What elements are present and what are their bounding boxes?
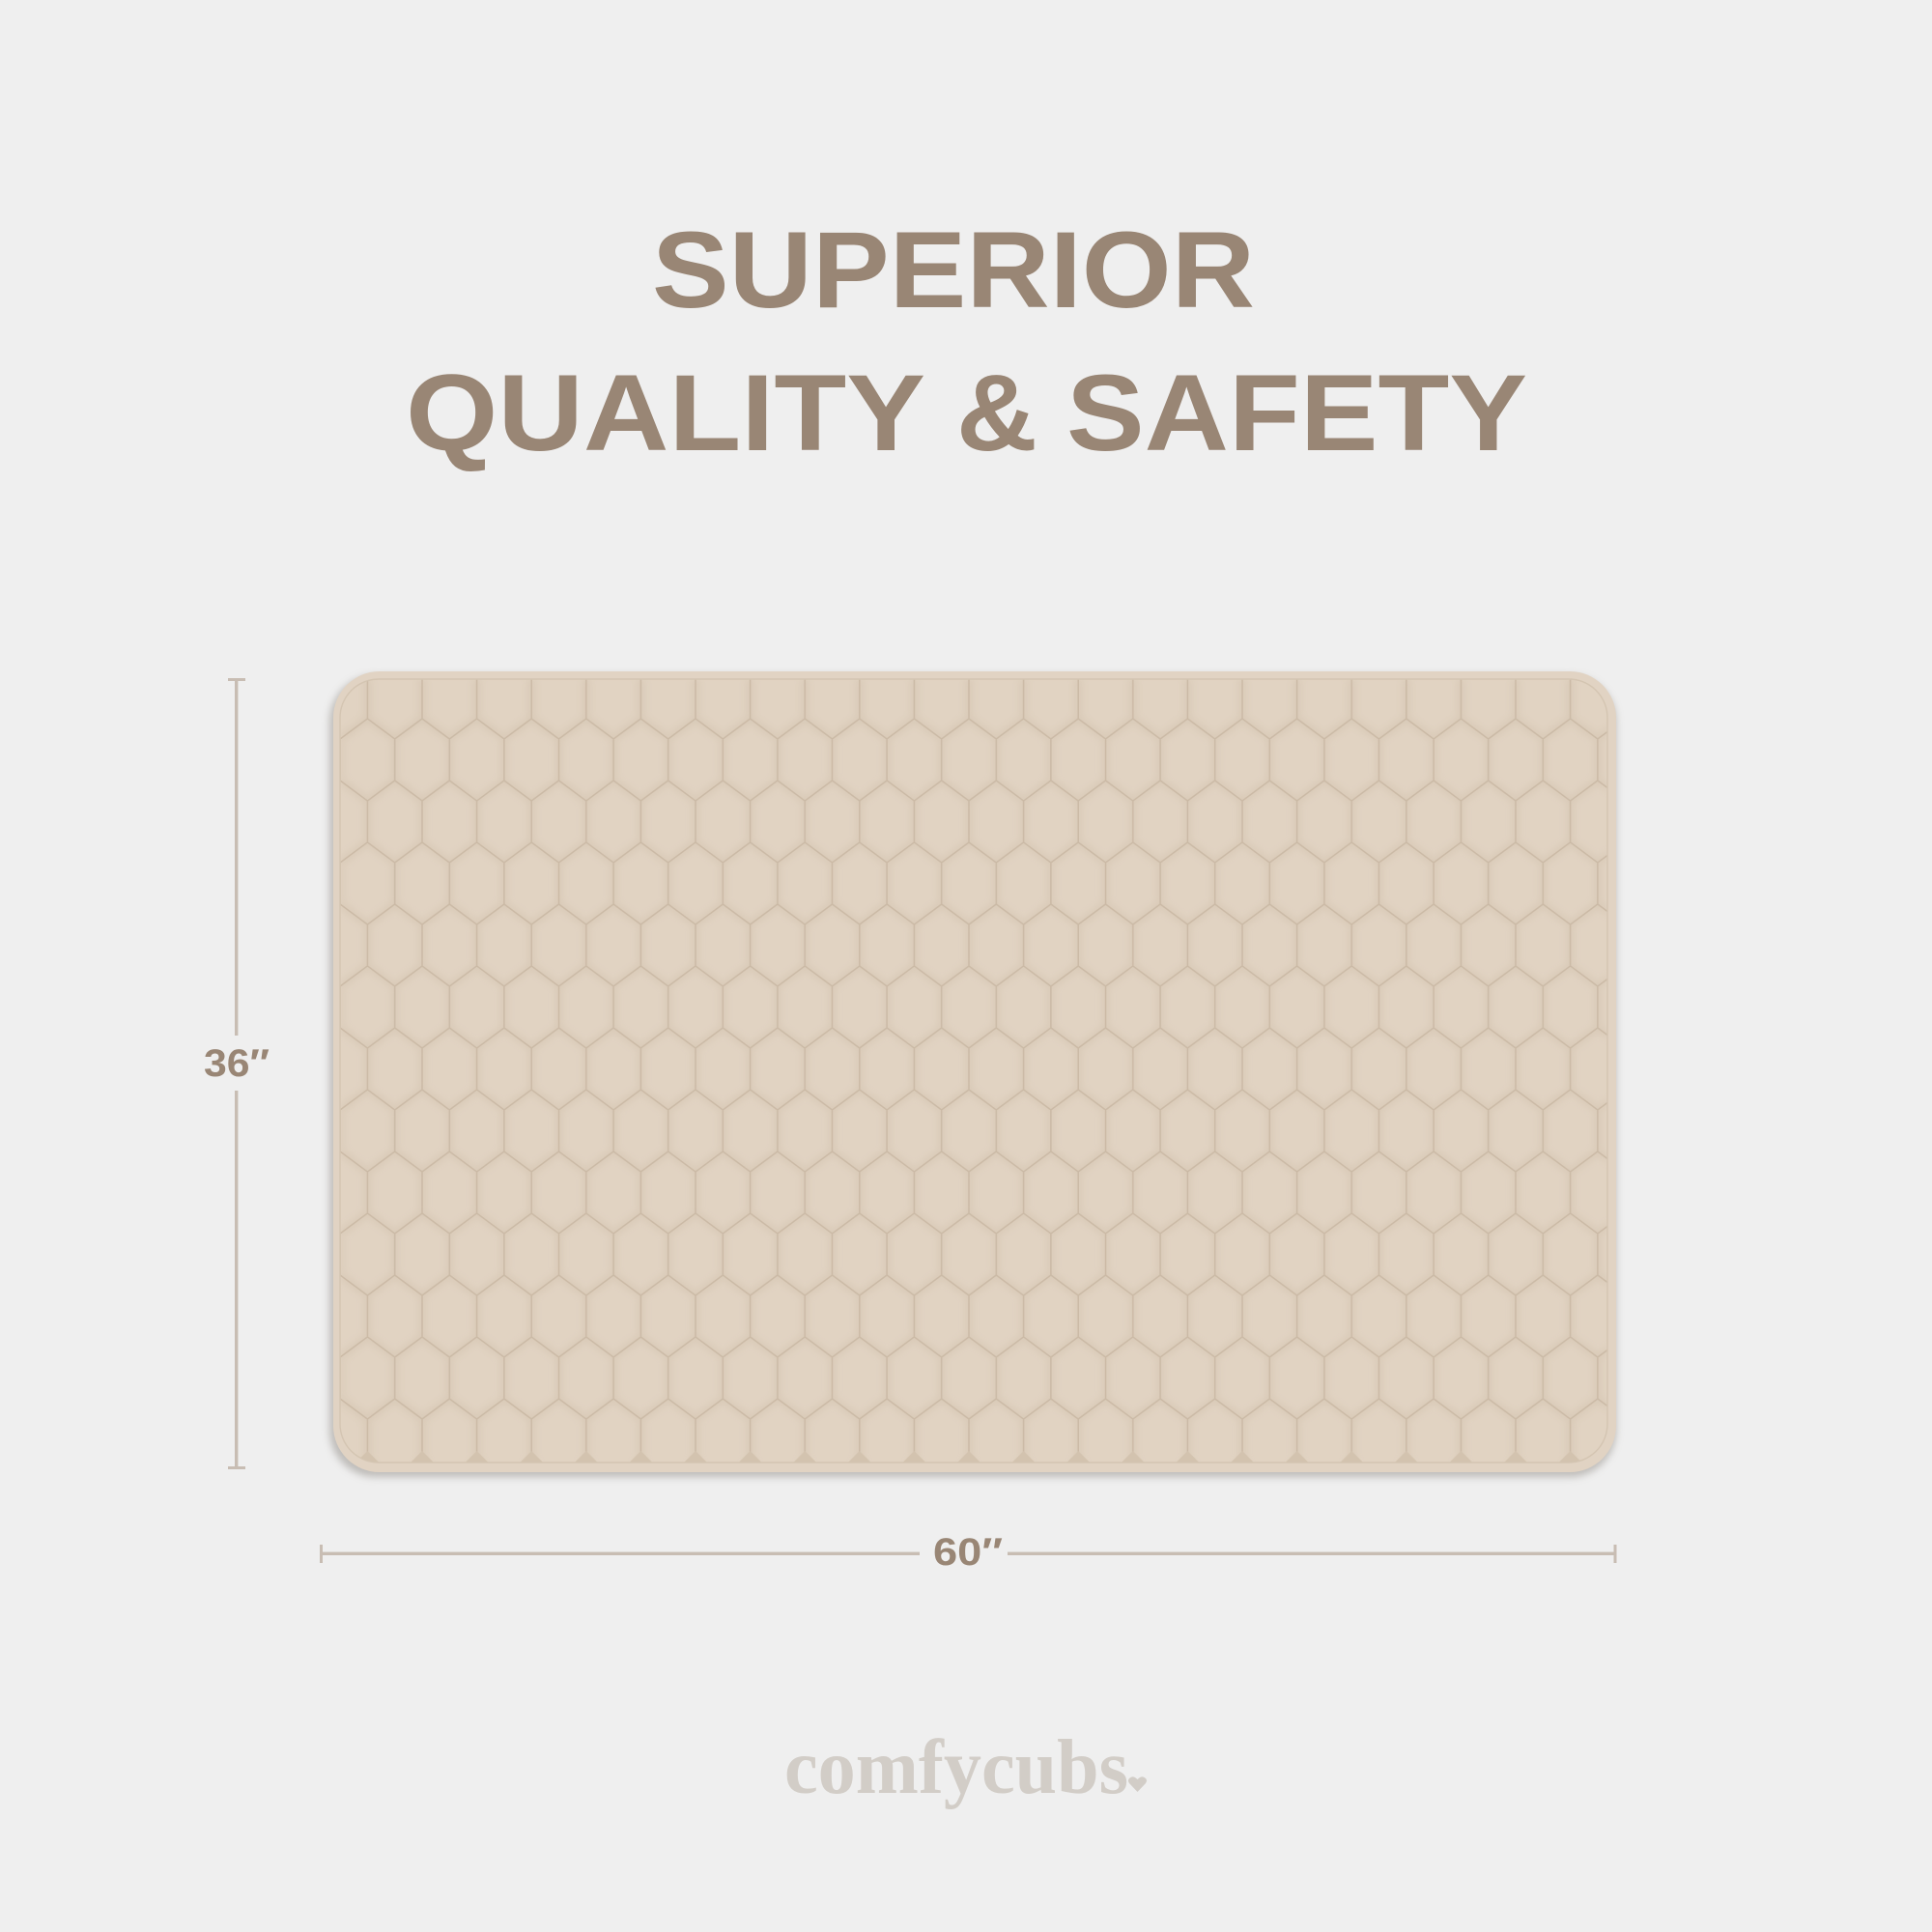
title: SAFETY <box>1066 352 1527 473</box>
height dimension line <box>228 678 245 1469</box>
mat quilted surface <box>340 679 1607 1463</box>
height label: 36″ <box>204 1042 270 1085</box>
mat border <box>333 671 1616 1472</box>
logo: comfycubs <box>784 1725 1128 1810</box>
quilted mat <box>329 671 1616 1477</box>
title: QUALITY <box>406 352 925 473</box>
mat shadow <box>329 675 1616 1477</box>
title: & <box>956 352 1037 473</box>
mat stitch line <box>340 679 1607 1463</box>
width dimension line <box>320 1545 1617 1563</box>
width label: 60″ <box>933 1531 1003 1574</box>
title <box>406 209 1527 473</box>
logo heart <box>1128 1776 1147 1792</box>
title: SUPERIOR <box>652 209 1255 330</box>
